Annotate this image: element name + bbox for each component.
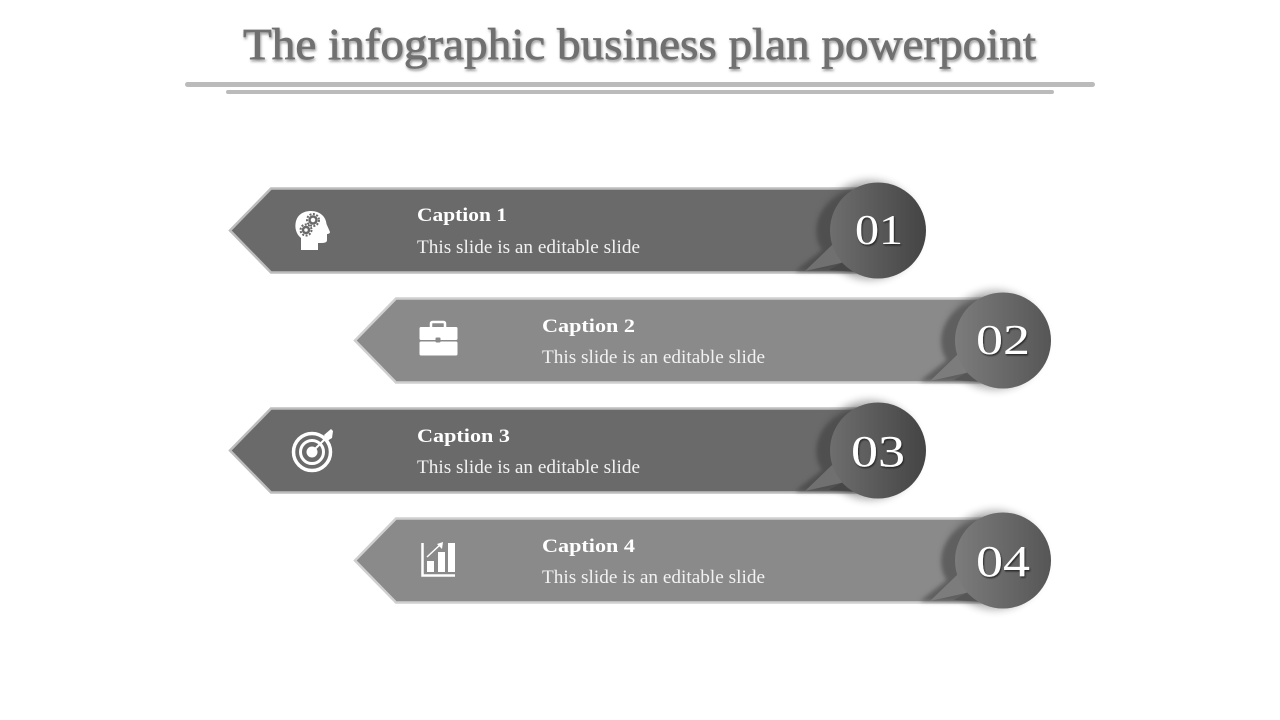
panel: caption 3 [230, 400, 926, 500]
icon: bar chart with arrow [422, 542, 455, 576]
caption body 2: This slide is an editable slide [542, 347, 765, 368]
panel: caption 1 [230, 180, 926, 280]
icon: target with arrow [294, 429, 333, 470]
caption body 1: This slide is an editable slide [417, 237, 640, 258]
icon: briefcase [420, 322, 458, 356]
caption heading 2: Caption 2 [542, 316, 635, 337]
panel: caption 4 [355, 510, 1051, 610]
number badge 3 [795, 400, 926, 500]
caption heading 4: Caption 4 [542, 536, 636, 557]
number badge 4: 04 [976, 537, 1030, 586]
panel: caption 2 [355, 290, 1051, 390]
caption heading 1: Caption 1 [417, 205, 507, 226]
banner shape 3 [230, 408, 880, 492]
icon: head with gears [295, 211, 330, 250]
number badge 2: 02 [976, 318, 1030, 364]
number badge 2 [920, 290, 1051, 390]
title: The infographic business plan powerpoint [243, 20, 1036, 69]
number badge 4 [920, 510, 1051, 610]
number badge 1: 01 [855, 208, 903, 254]
caption heading 3: Caption 3 [417, 426, 510, 447]
banner shape 2 [355, 298, 1005, 382]
banner shape 1 [230, 188, 880, 272]
banner shape 4 [355, 518, 1005, 602]
caption body 3: This slide is an editable slide [417, 457, 640, 478]
title underline [185, 82, 1095, 94]
number badge 1 [795, 180, 926, 280]
number badge 3: 03 [851, 427, 905, 476]
caption body 4: This slide is an editable slide [542, 567, 765, 588]
